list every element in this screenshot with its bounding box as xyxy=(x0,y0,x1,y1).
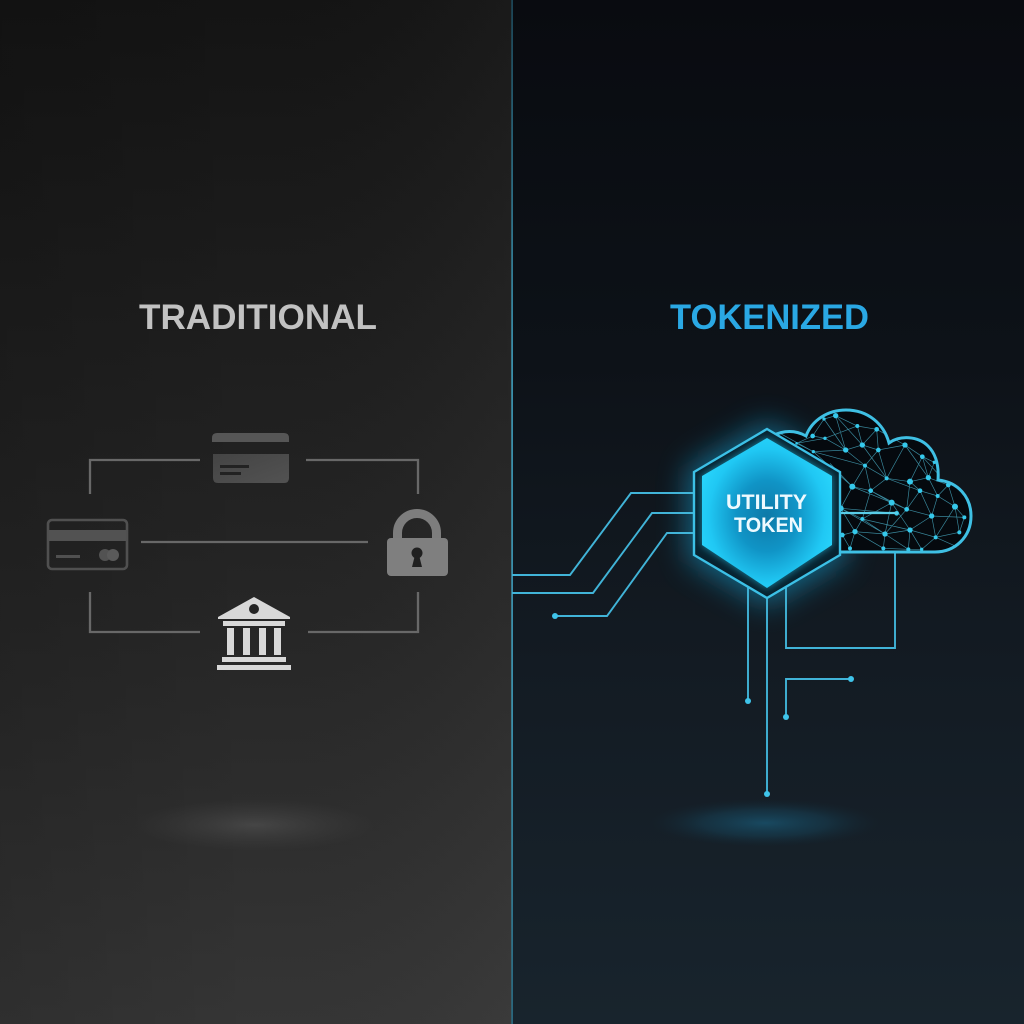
circuit end nodes xyxy=(552,613,854,797)
token label: TOKEN xyxy=(734,514,803,537)
center divider line xyxy=(511,0,513,1024)
floor glow: tokenized xyxy=(650,799,880,847)
utility token hexagon xyxy=(694,429,840,598)
hexagon halo xyxy=(688,422,846,606)
icon: left credit card xyxy=(48,520,127,569)
heading: tokenized: TOKENIZED xyxy=(670,298,869,337)
icon: top credit card xyxy=(212,433,289,483)
panel: traditional background xyxy=(0,0,512,1024)
icon: bank building xyxy=(217,597,291,670)
icon: padlock xyxy=(387,514,448,576)
floor glow: traditional xyxy=(135,799,375,851)
token label: UTILITY xyxy=(726,491,807,514)
traditional connector lines xyxy=(90,460,418,632)
cloud with neural network xyxy=(770,410,971,552)
token label xyxy=(726,491,807,537)
panel: tokenized background xyxy=(512,0,1024,1024)
heading: traditional: TRADITIONAL xyxy=(139,298,377,337)
circuit traces xyxy=(512,493,895,794)
network mesh xyxy=(780,413,966,551)
